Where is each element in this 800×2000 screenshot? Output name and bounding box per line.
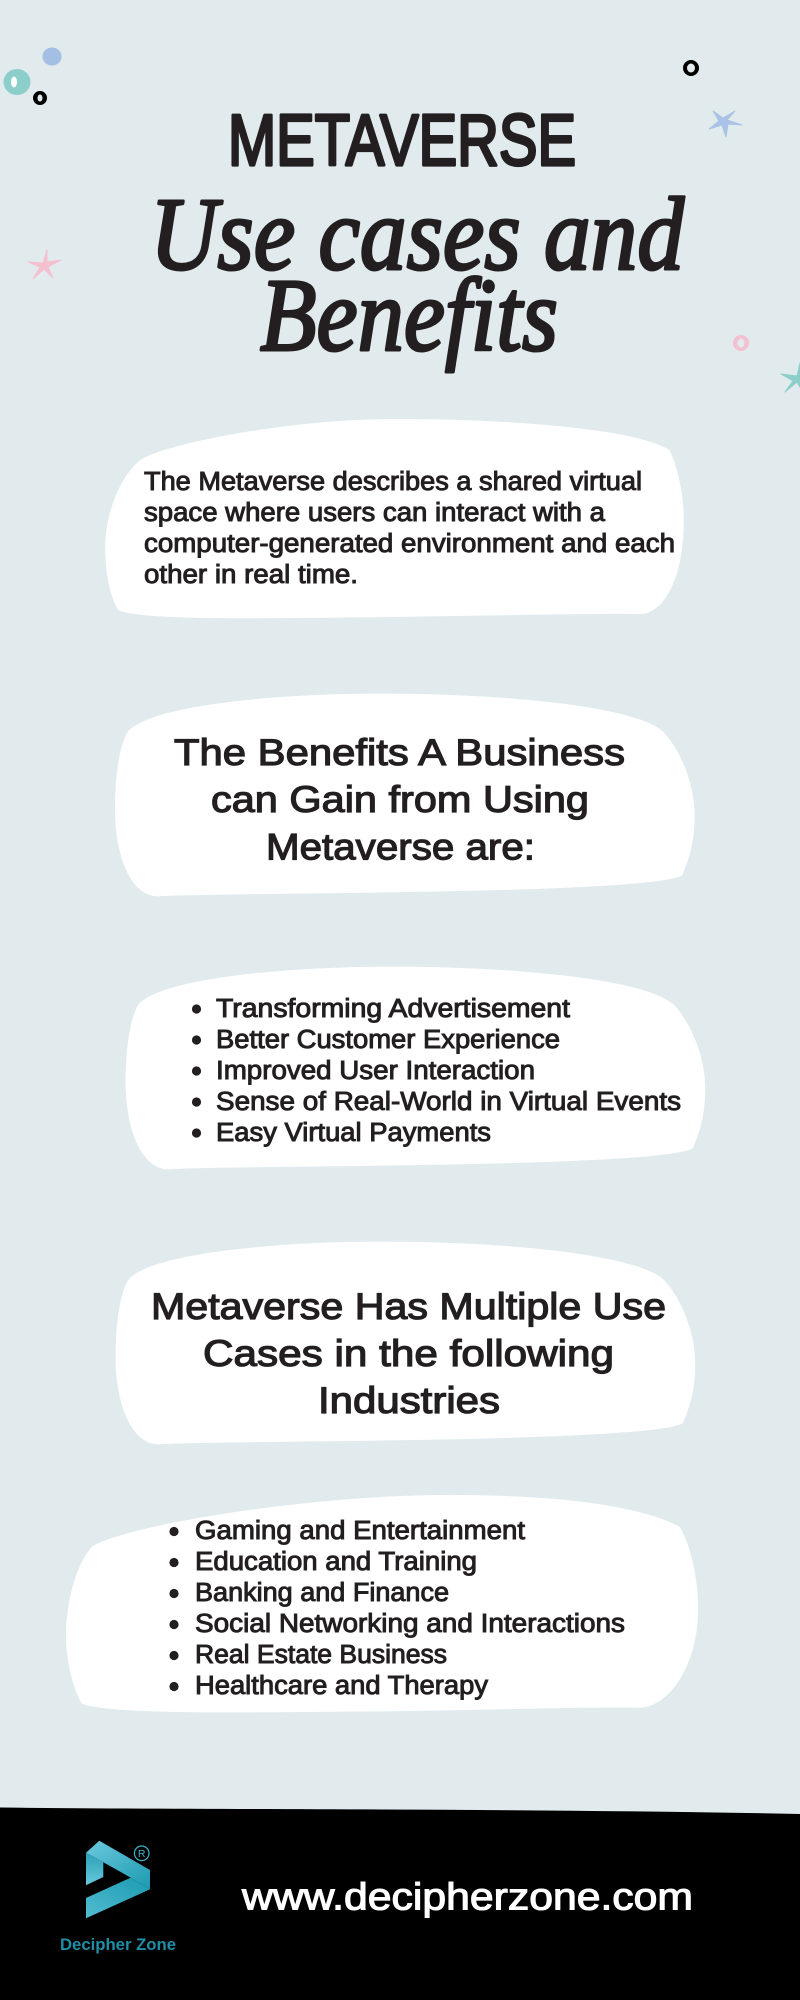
panel: benefits heading — [115, 694, 695, 896]
list text: Healthcare and Therapy — [195, 1672, 488, 1700]
intro text: other in real time. — [144, 561, 358, 589]
title line: Use cases and: Use cases and — [150, 177, 685, 292]
panel: industries heading — [116, 1242, 695, 1444]
list text: Gaming and Entertainment — [195, 1517, 525, 1545]
logo: Decipher Zone — [60, 1841, 176, 1954]
intro text: computer-generated environment and each — [144, 530, 675, 558]
intro text: space where users can interact with a — [144, 499, 606, 527]
heading text: Metaverse Has Multiple Use — [151, 1286, 666, 1327]
icon: pink ring — [733, 335, 749, 351]
list text: Improved User Interaction — [216, 1057, 535, 1085]
blob — [115, 694, 695, 896]
icon: pink star — [28, 250, 61, 279]
heading text — [151, 1286, 666, 1421]
heading text — [174, 732, 625, 868]
list text: Transforming Advertisement — [216, 995, 570, 1023]
heading text: Industries — [318, 1380, 500, 1421]
list text: Real Estate Business — [195, 1641, 447, 1669]
website url: www.decipherzone.com — [241, 1876, 693, 1918]
icon: small black ring — [33, 91, 47, 105]
heading text: can Gain from Using — [211, 779, 589, 820]
panel: industries list — [66, 1495, 698, 1712]
bullets — [192, 1004, 201, 1138]
title line: Benefits: Benefits — [260, 258, 558, 373]
icon: teal star — [781, 363, 800, 392]
blob — [116, 1242, 695, 1444]
registered mark: R — [138, 1848, 146, 1860]
blob — [105, 419, 684, 618]
list text: Social Networking and Interactions — [195, 1610, 625, 1638]
list text — [195, 1517, 625, 1700]
icon: blue dot — [42, 48, 62, 66]
footer — [0, 1808, 800, 2000]
list text: Education and Training — [195, 1548, 477, 1576]
heading text: Cases in the following — [203, 1333, 614, 1374]
list text — [216, 995, 681, 1147]
logo name: Decipher Zone — [60, 1935, 176, 1954]
bullets — [169, 1527, 179, 1691]
footer band — [0, 1808, 800, 2000]
icon: blue star — [709, 111, 742, 137]
panel: intro — [105, 419, 684, 618]
panel: benefits list — [126, 967, 705, 1169]
icon: teal ring — [4, 69, 30, 95]
heading text: Metaverse are: — [266, 826, 535, 868]
blob — [126, 967, 705, 1169]
intro text — [144, 468, 675, 589]
icon: black ring right — [683, 60, 699, 76]
list text: Better Customer Experience — [216, 1026, 560, 1054]
intro text: The Metaverse describes a shared virtual — [144, 468, 642, 496]
blob — [66, 1495, 698, 1712]
list text: Sense of Real-World in Virtual Events — [216, 1088, 681, 1116]
logo mark — [86, 1841, 150, 1918]
title line: METAVERSE: METAVERSE — [228, 101, 576, 181]
list text: Banking and Finance — [195, 1579, 449, 1607]
decorative shapes — [4, 48, 800, 392]
list text: Easy Virtual Payments — [216, 1119, 491, 1147]
heading text: The Benefits A Business — [174, 732, 625, 773]
title — [150, 101, 685, 373]
